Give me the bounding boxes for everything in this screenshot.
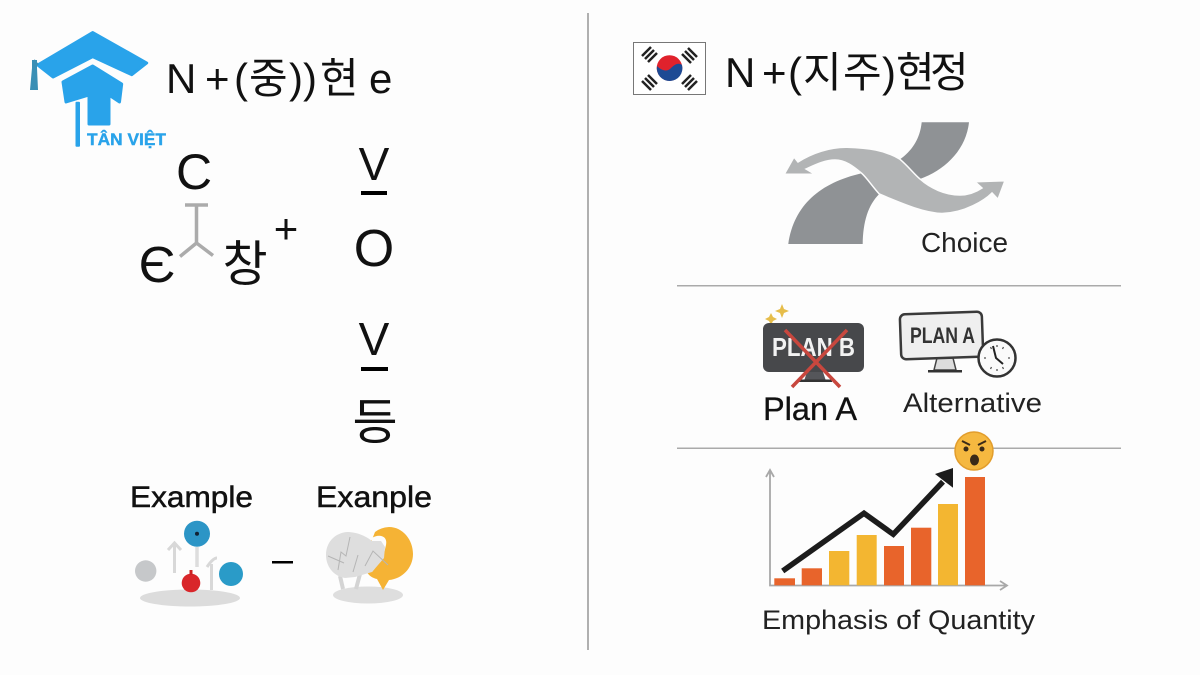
label: Exanple: Exanple (316, 481, 432, 514)
heading: left title: N+(중))현 e (166, 55, 392, 102)
letter V with underline, lower: V (359, 313, 390, 365)
panel: left column (30, 32, 432, 606)
dash (272, 561, 293, 564)
logo: Tan Viet (30, 32, 167, 149)
heading: right title: N+(지주)현정 (725, 49, 969, 96)
icon: Plan B monitor crossed out: PLAN B (772, 332, 855, 362)
icon: choice crossing arrows (784, 122, 1005, 244)
trend arrow (783, 468, 953, 571)
icon: balls and arrows (135, 521, 243, 606)
korean syllable: chang: 창 (222, 238, 268, 292)
logo: Tan Viet: TÂN VIỆT (87, 130, 167, 149)
icon: Plan B monitor crossed out (763, 304, 864, 387)
letter V with underline, upper: V (359, 138, 390, 190)
label: Alternative: Alternative (903, 388, 1042, 418)
icon: grey branch (180, 205, 213, 256)
plus sign: + (274, 205, 298, 252)
chart bars (774, 477, 985, 585)
label: Plan A: Plan A (763, 391, 858, 427)
letter C: C (176, 144, 212, 200)
icon: brain and speech bubble (326, 527, 413, 604)
symbol: element: Є (139, 236, 175, 293)
icon: shocked angry emoji (955, 432, 993, 470)
icon: Korean flag (634, 42, 706, 94)
bar chart: emphasis of quantity (766, 432, 1007, 590)
chart axes (766, 470, 1007, 590)
korean syllable: deung: 등 (352, 396, 398, 450)
label: Emphasis of Quantity: Emphasis of Quantity (762, 605, 1036, 635)
label: Example: Example (130, 481, 253, 514)
label: Choice: Choice (921, 227, 1008, 258)
icon: Plan A monitor with clock (900, 312, 1016, 376)
icon: Plan A monitor with clock: PLAN A (910, 323, 975, 348)
letter O: O (354, 220, 394, 278)
panel: right column (634, 42, 1121, 635)
